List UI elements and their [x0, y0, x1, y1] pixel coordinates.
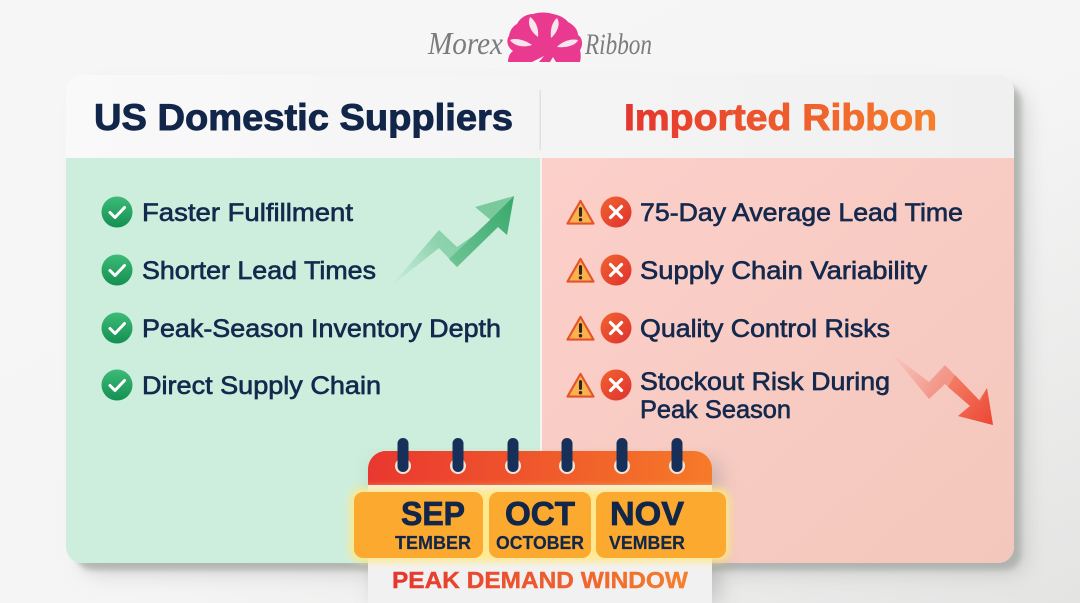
- list item: Stockout Risk During Peak Season: Stockout Risk During: [640, 368, 890, 396]
- list item: Stockout Risk During Peak Season: Peak Season: [640, 396, 791, 424]
- list item: Quality Control Risks: [567, 312, 890, 344]
- logo text: Ribbon: Ribbon: [584, 28, 652, 61]
- arrow: rising trend: [390, 196, 514, 287]
- month: November: NOV: [610, 495, 684, 532]
- list item: 75-Day Average Lead Time: 75-Day Average Lead Time: [640, 199, 963, 227]
- list item: Peak-Season Inventory Depth: Peak-Season Inventory Depth: [142, 315, 501, 343]
- arrow: falling trend: [890, 352, 993, 425]
- calendar: peak demand window: [350, 438, 730, 603]
- month: October: OCT: [505, 495, 575, 532]
- month: September: [354, 492, 483, 558]
- list item: Quality Control Risks: Quality Control Risks: [640, 315, 890, 343]
- heading: US Domestic Suppliers: US Domestic Suppliers: [94, 97, 513, 138]
- calendar rings: [395, 438, 685, 474]
- heading: Imported Ribbon: Imported Ribbon: [624, 97, 937, 138]
- month: October: [489, 492, 591, 558]
- list item: Faster Fulfillment: [102, 196, 353, 228]
- month: September: TEMBER: [395, 533, 471, 553]
- logo icon: pink ribbon flower: [507, 12, 582, 62]
- month: November: VEMBER: [609, 533, 685, 553]
- panel: imported ribbon: [542, 97, 1014, 563]
- logo text: Morex: Morex: [427, 25, 503, 61]
- list item: Shorter Lead Times: Shorter Lead Times: [142, 257, 376, 285]
- panel: US domestic suppliers: [66, 97, 540, 563]
- list item: Stockout Risk During Peak Season: [567, 368, 890, 424]
- list item: 75-Day Average Lead Time: [567, 196, 963, 228]
- logo: Morex Ribbon: [427, 12, 652, 62]
- list item: Direct Supply Chain: Direct Supply Chain: [142, 372, 381, 400]
- list item: Supply Chain Variability: [567, 254, 928, 286]
- month: September: SEP: [401, 495, 465, 532]
- calendar header: [368, 451, 712, 485]
- month: November: [596, 492, 726, 558]
- caption: peak demand window: PEAK DEMAND WINDOW: [392, 567, 688, 593]
- comparison card: [66, 75, 1027, 575]
- month: October: OCTOBER: [496, 533, 584, 553]
- list item: Supply Chain Variability: Supply Chain Variability: [640, 257, 928, 285]
- list item: Faster Fulfillment: Faster Fulfillment: [142, 199, 353, 227]
